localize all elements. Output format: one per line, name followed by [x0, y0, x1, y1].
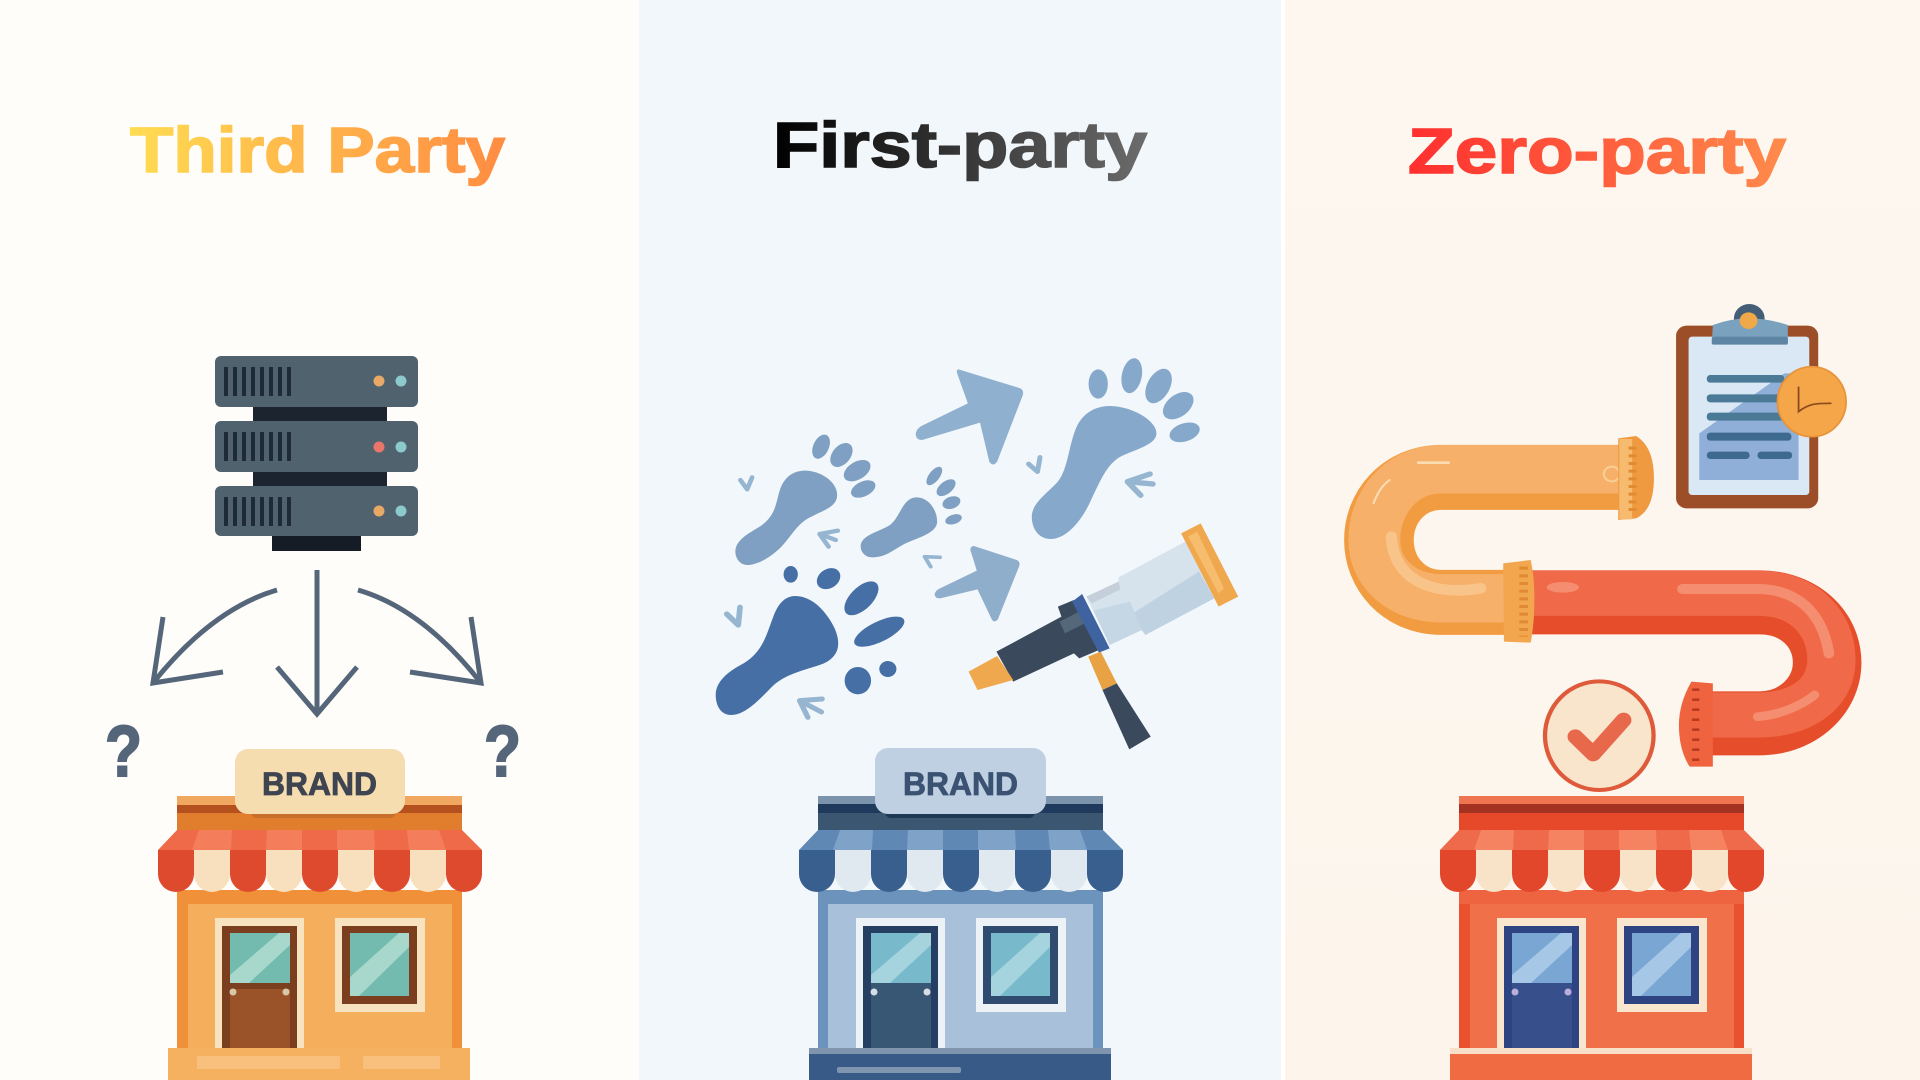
footprint: large upper right — [1032, 357, 1203, 539]
store: orange brand storefront: BRAND — [262, 766, 377, 802]
icon: check mark badge — [1545, 681, 1654, 790]
store: blue brand storefront — [799, 748, 1123, 1080]
icon: server rack — [215, 356, 418, 551]
pipe: orange section — [1374, 436, 1654, 643]
panel: zero party — [1285, 0, 1920, 1080]
title: Third Party: Third Party — [130, 114, 505, 186]
store: orange brand storefront — [158, 749, 482, 1080]
small chevrons and mini arrows — [727, 457, 1153, 717]
panel background: zero party — [1285, 0, 1920, 1080]
title: Zero-party: Zero-party — [1408, 115, 1786, 187]
store: red storefront — [1440, 796, 1764, 1080]
icon: clipboard with survey — [1676, 304, 1846, 508]
footprint: large dark — [716, 564, 909, 715]
arrow: large — [916, 369, 1023, 464]
question mark: right: ? — [484, 712, 521, 792]
title: First-party: First-party — [773, 109, 1147, 181]
question mark: left: ? — [105, 712, 142, 792]
pipe: red section — [1531, 582, 1831, 767]
panel background: third party — [0, 0, 639, 1080]
panel: third party — [0, 0, 639, 1080]
panel: first party — [639, 0, 1281, 1080]
footprint: small centre — [861, 464, 963, 557]
store: blue brand storefront: BRAND — [903, 766, 1018, 802]
panel background: first party — [639, 0, 1281, 1080]
arrow: medium — [935, 546, 1020, 621]
footprints and direction arrows — [716, 357, 1203, 717]
icon: telescope — [969, 523, 1238, 749]
arrows: three directions — [153, 570, 481, 714]
footprint: medium left — [735, 432, 879, 565]
